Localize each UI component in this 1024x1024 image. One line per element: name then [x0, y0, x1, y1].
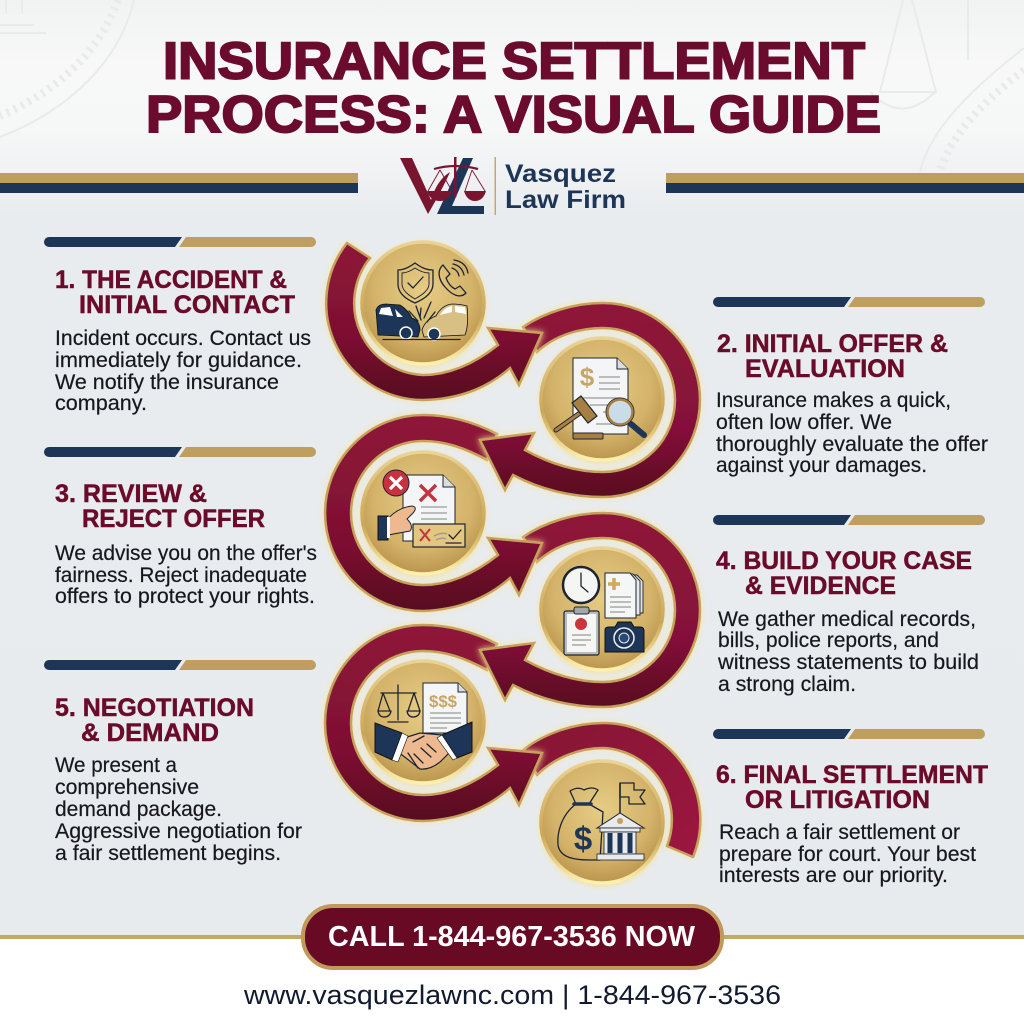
- logo: Vasquez Law Firm: Law Firm: [505, 186, 626, 214]
- body text: [717, 608, 979, 696]
- ribbon: step 3 arrow: [325, 415, 542, 611]
- heading: 4. BUILD YOUR CASE: [716, 547, 972, 575]
- body text: [55, 754, 302, 865]
- title: PROCESS: A VISUAL GUIDE: [146, 86, 881, 144]
- heading: EVALUATION: [745, 355, 905, 383]
- body text: [55, 542, 317, 608]
- icon medallion 4: clock, records, clipboard, camera: [541, 548, 663, 670]
- title: [146, 32, 881, 144]
- heading: [716, 761, 988, 814]
- panel: step 4: [713, 515, 985, 696]
- body text: company.: [55, 392, 147, 415]
- body text: comprehensive: [55, 776, 199, 799]
- body text: bills, police reports, and: [718, 629, 939, 652]
- body text: prepare for court. Your best: [719, 843, 976, 866]
- body text: offers to protect your rights.: [55, 585, 315, 608]
- logo: Vasquez Law Firm: [400, 157, 626, 215]
- body text: [55, 327, 311, 415]
- panel: step 3: [44, 447, 317, 608]
- ribbon: step 5 arrow: [325, 625, 542, 821]
- heading: & EVIDENCE: [745, 572, 896, 600]
- heading: OR LITIGATION: [745, 786, 930, 814]
- icon medallion 2: document, gavel, magnifier: [541, 338, 663, 460]
- title: INSURANCE SETTLEMENT: [163, 32, 865, 90]
- heading: [55, 266, 295, 319]
- rule: [713, 297, 985, 307]
- icon medallion 6: money bag and courthouse: $: [574, 820, 592, 857]
- header rule left: [0, 173, 358, 193]
- body text: a strong claim.: [718, 673, 856, 696]
- rule: [713, 729, 985, 739]
- heading: 5. NEGOTIATION: [55, 694, 254, 722]
- call to action button: [303, 906, 722, 968]
- faint legal watermark decoration: [0, 0, 1024, 172]
- body text: Incident occurs. Contact us: [55, 327, 311, 350]
- body text: often low offer. We: [716, 411, 892, 434]
- flow ribbons: [325, 243, 700, 857]
- ribbon: step 1 arrow: [326, 243, 542, 400]
- body text: We gather medical records,: [718, 608, 976, 631]
- body text: thoroughly evaluate the offer: [716, 433, 988, 456]
- heading: [55, 694, 254, 747]
- body text: Insurance makes a quick,: [716, 389, 951, 412]
- body text: against your damages.: [716, 454, 927, 477]
- panel: step 1: [44, 237, 316, 415]
- icon medallion 2: document, gavel, magnifier: $: [580, 362, 595, 392]
- rule: [44, 447, 316, 457]
- heading: & DEMAND: [81, 719, 219, 747]
- body text: We advise you on the offer's: [55, 542, 317, 565]
- body text: fairness. Reject inadequate: [55, 564, 307, 587]
- body text: [719, 821, 976, 887]
- body text: [716, 389, 988, 477]
- icon medallion 3: rejected offer: [362, 452, 484, 574]
- heading: INITIAL CONTACT: [79, 291, 295, 319]
- ribbon: to step 6: [523, 723, 700, 857]
- panel: step 5: [44, 660, 316, 865]
- rule: [44, 660, 316, 670]
- heading: [55, 480, 265, 533]
- icon medallion 5: scales, demand, handshake: $$$: [429, 692, 458, 711]
- heading: 1. THE ACCIDENT &: [55, 266, 287, 294]
- header rule right: [666, 173, 1024, 193]
- heading: [717, 330, 948, 383]
- ribbon: step 4 arrow: [480, 513, 700, 707]
- body text: immediately for guidance.: [55, 349, 302, 372]
- website and phone: www.vasquezlawnc.com | 1-844-967-3536: [243, 980, 781, 1010]
- heading: 6. FINAL SETTLEMENT: [716, 761, 988, 789]
- body text: Aggressive negotiation for: [55, 820, 302, 843]
- panel: step 2: [713, 297, 988, 477]
- body text: We notify the insurance: [55, 371, 279, 394]
- body text: Reach a fair settlement or: [719, 821, 960, 844]
- ribbon: step 2 arrow: [480, 303, 700, 497]
- body text: We present a: [55, 754, 177, 777]
- call to action button: CALL 1-844-967-3536 NOW: [328, 921, 696, 953]
- body text: witness statements to build: [717, 651, 979, 674]
- rule: [44, 237, 316, 247]
- body text: demand package.: [55, 798, 222, 821]
- icon medallion 1: crash, shield, phone: [362, 242, 484, 364]
- footer divider line: [0, 935, 1024, 939]
- icon medallion 6: money bag and courthouse: [541, 761, 663, 883]
- icon medallion 5: scales, demand, handshake: [362, 661, 484, 783]
- heading: 2. INITIAL OFFER &: [717, 330, 948, 358]
- body text: a fair settlement begins.: [55, 842, 281, 865]
- logo: Vasquez Law Firm: Vasquez: [505, 160, 616, 188]
- heading: [716, 547, 972, 600]
- heading: REJECT OFFER: [82, 505, 265, 533]
- panel: step 6: [713, 729, 988, 887]
- body text: interests are our priority.: [719, 864, 948, 887]
- heading: 3. REVIEW &: [55, 480, 207, 508]
- rule: [713, 515, 985, 525]
